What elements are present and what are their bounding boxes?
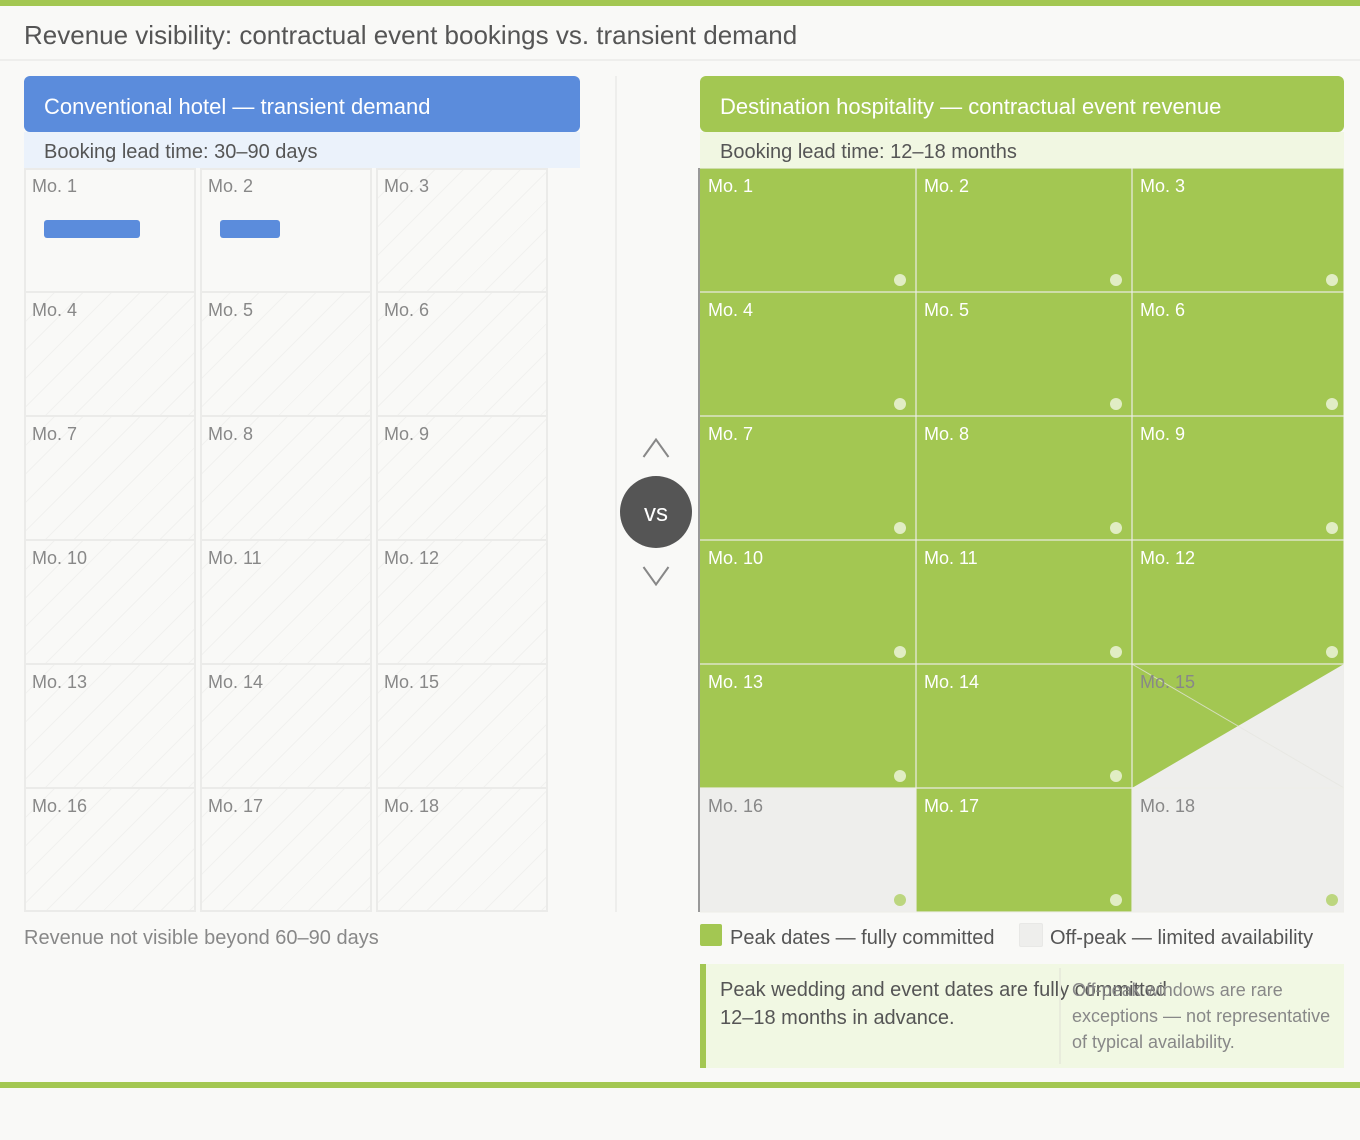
month grid: conventional hotel: [24, 168, 548, 912]
month 11: Mo. 11: [924, 548, 978, 568]
month 14: Mo. 14: [924, 672, 979, 692]
arrow down: [642, 566, 670, 586]
month 4: [700, 292, 916, 416]
callout main text: Peak wedding and event dates are fully committed 12–18 months in advance.: [720, 979, 1167, 1029]
month 6: [376, 291, 548, 417]
month 10: [700, 540, 916, 664]
month 7: [700, 416, 916, 540]
month 16: [700, 788, 916, 912]
legend: [700, 923, 1313, 949]
title: [0, 6, 1360, 61]
month 9: [376, 415, 548, 541]
month 12: [1132, 540, 1344, 664]
month 3: [376, 168, 548, 293]
month 3: [1132, 168, 1344, 292]
month 18: [1132, 788, 1344, 912]
conventional hotel header: Conventional hotel — transient demand: [44, 94, 430, 119]
month 13: Mo. 13: [708, 672, 763, 692]
month 1 with booking bar: [24, 168, 196, 293]
month 12: Mo. 12: [384, 548, 439, 568]
month 13: [24, 663, 196, 789]
month 1: Mo. 1: [708, 176, 753, 196]
month 2: Mo. 2: [924, 176, 969, 196]
month 12: [376, 539, 548, 665]
month 2 with booking bar: [200, 168, 372, 293]
month 10: Mo. 10: [32, 548, 87, 568]
month 18: [376, 787, 548, 912]
month 8: Mo. 8: [924, 424, 969, 444]
top accent bar: [0, 0, 1360, 6]
versus marker: [620, 438, 692, 586]
month 8: [200, 415, 372, 541]
month 17: [916, 788, 1132, 912]
conventional caption: Revenue not visible beyond 60–90 days: [24, 927, 379, 949]
month 9: Mo. 9: [384, 424, 429, 444]
month 15: Mo. 15: [384, 672, 439, 692]
month 8: Mo. 8: [208, 424, 253, 444]
month 16: Mo. 16: [32, 796, 87, 816]
month 9: [1132, 416, 1344, 540]
month 2 with booking bar: Mo. 2: [208, 176, 253, 196]
month 14: [200, 663, 372, 789]
month 5: [200, 291, 372, 417]
center divider: [615, 76, 617, 912]
month 15 label: Mo. 15: [1140, 672, 1195, 692]
bottom accent bar: [0, 1082, 1360, 1088]
callout: [700, 964, 1344, 1068]
destination header: Destination hospitality — contractual event revenue: [720, 94, 1221, 119]
conventional lead time: Booking lead time: 30–90 days: [44, 141, 318, 163]
conventional hotel header: [24, 76, 580, 132]
month 3: Mo. 3: [384, 176, 429, 196]
month 1: [700, 168, 916, 292]
month 4: [24, 291, 196, 417]
month 11: Mo. 11: [208, 548, 262, 568]
legend swatch: peak: [700, 924, 722, 946]
destination header: [700, 76, 1344, 132]
legend label: off-peak: Off-peak — limited availability: [1050, 927, 1313, 949]
month 11: [200, 539, 372, 665]
month 17: Mo. 17: [924, 796, 979, 816]
callout side note: Off-peak windows are rare exceptions — not representative of typical availability.: [1072, 980, 1330, 1052]
month 8: [916, 416, 1132, 540]
month 6: [1132, 292, 1344, 416]
month 13: [700, 664, 916, 788]
month 16: [24, 787, 196, 912]
destination lead time: [700, 132, 1344, 168]
month 17: [200, 787, 372, 912]
month 14: [916, 664, 1132, 788]
month 15 split cell: [1132, 664, 1344, 788]
month 14: Mo. 14: [208, 672, 263, 692]
booking bar month 2: [220, 220, 280, 238]
panel: destination hospitality: [698, 76, 1344, 1068]
vs badge: vs: [644, 500, 668, 527]
month 5: [916, 292, 1132, 416]
month 9: Mo. 9: [1140, 424, 1185, 444]
month 1 with booking bar: Mo. 1: [32, 176, 77, 196]
month 13: Mo. 13: [32, 672, 87, 692]
legend swatch: off-peak: [1019, 923, 1043, 947]
month 7: Mo. 7: [32, 424, 77, 444]
legend label: peak: Peak dates — fully committed: [730, 927, 995, 949]
arrow up: [642, 438, 670, 458]
split cell fill: [1132, 664, 1344, 788]
callout divider: [1059, 968, 1061, 1064]
month 4: Mo. 4: [708, 300, 753, 320]
month 18: Mo. 18: [384, 796, 439, 816]
month 10: [24, 539, 196, 665]
month 11: [916, 540, 1132, 664]
conventional lead time: [24, 132, 580, 168]
month 5: Mo. 5: [924, 300, 969, 320]
vs badge: [620, 476, 692, 548]
month 7: Mo. 7: [708, 424, 753, 444]
month 6: Mo. 6: [1140, 300, 1185, 320]
month 12: Mo. 12: [1140, 548, 1195, 568]
month 2: [916, 168, 1132, 292]
month 15: [376, 663, 548, 789]
month 18: Mo. 18: [1140, 796, 1195, 816]
month 6: Mo. 6: [384, 300, 429, 320]
month 17: Mo. 17: [208, 796, 263, 816]
month grid: destination hospitality: [698, 168, 1344, 912]
title: Revenue visibility: contractual event bookings vs. transient demand: [24, 20, 797, 50]
month 7: [24, 415, 196, 541]
destination lead time: Booking lead time: 12–18 months: [720, 141, 1017, 163]
booking bar month 1: [44, 220, 140, 238]
month 4: Mo. 4: [32, 300, 77, 320]
month 3: Mo. 3: [1140, 176, 1185, 196]
month 10: Mo. 10: [708, 548, 763, 568]
month 16: Mo. 16: [708, 796, 763, 816]
month 5: Mo. 5: [208, 300, 253, 320]
panel: conventional hotel: [24, 76, 580, 949]
